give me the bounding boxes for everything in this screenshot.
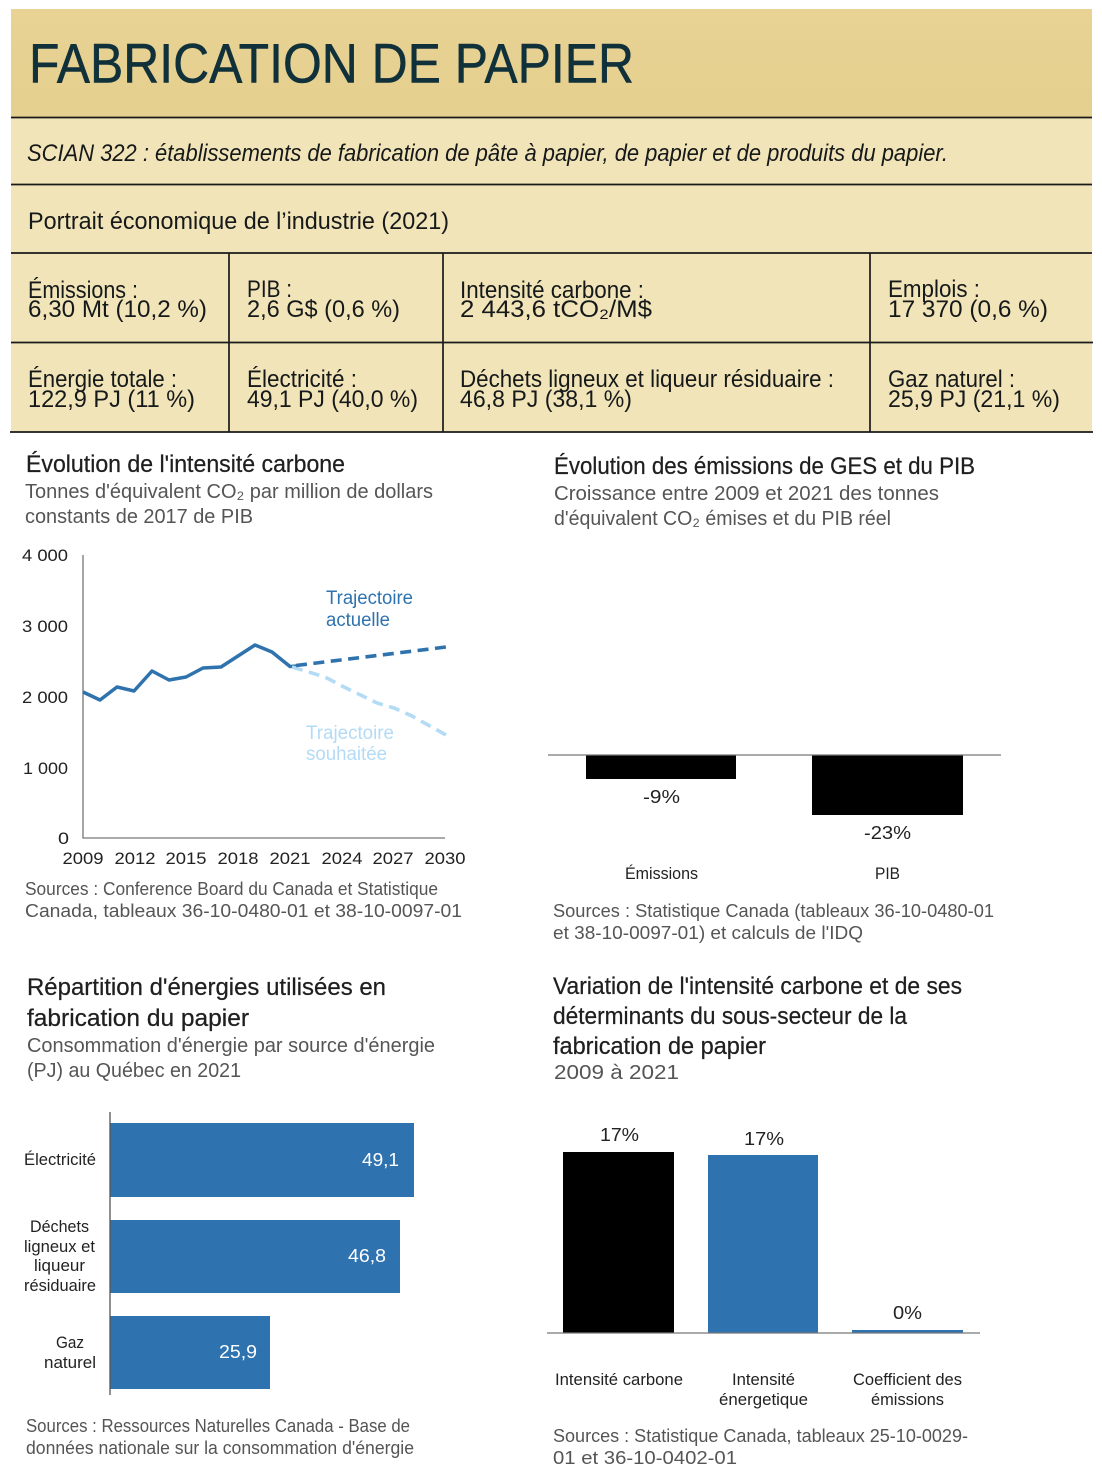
line chart: 2009 xyxy=(62,849,104,868)
figure: electricity: 49,1 PJ (40,0 %) xyxy=(247,386,418,413)
heading: carbon intensity drivers: déterminants du sous-secteur de la xyxy=(553,1003,908,1030)
figure: electricity: Électricité : xyxy=(247,366,357,393)
bar chart: emissions and GDP xyxy=(548,755,1001,883)
figure: GDP: PIB : xyxy=(247,276,292,303)
sources: energy mix: Sources : Ressources Naturelles Canada - Base de xyxy=(26,1415,410,1436)
figure: GDP: 2,6 G$ (0,6 %) xyxy=(247,296,400,323)
heading: energy mix: fabrication du papier xyxy=(27,1005,249,1032)
figure: jobs xyxy=(888,276,1048,323)
sources: carbon intensity drivers: 01 et 36-10-0402-01 xyxy=(553,1447,737,1468)
bar chart: drivers: 17% xyxy=(744,1129,784,1149)
line chart xyxy=(22,546,466,868)
line chart: 0 xyxy=(58,829,69,848)
line chart: 2021 xyxy=(270,849,310,868)
heading: energy mix: Répartition d'énergies utilisées en xyxy=(27,974,386,1001)
subtitle: energy mix: Consommation d'énergie par source d'énergie xyxy=(27,1034,435,1057)
line chart: 2015 xyxy=(166,849,206,868)
heading: carbon intensity drivers: fabrication de papier xyxy=(553,1033,766,1060)
sources: carbon intensity trend: Canada, tableaux 36-10-0480-01 et 38-10-0097-01 xyxy=(25,900,462,921)
bar chart: drivers: énergetique xyxy=(719,1391,808,1409)
bar chart: energy sources: 49,1 xyxy=(362,1150,399,1170)
sources: GHG emissions and GDP: Sources : Statistique Canada (tableaux 36-10-0480-01 xyxy=(553,900,994,921)
panel: carbon intensity drivers xyxy=(547,973,980,1468)
subtitle: GHG emissions and GDP xyxy=(554,482,939,530)
sources: carbon intensity trend: Sources : Conference Board du Canada et Statistique xyxy=(25,878,438,899)
figure: wood waste and spent liquor: 46,8 PJ (38,1 %) xyxy=(460,386,632,413)
panel: economic portrait heading: Portrait économique de l’industrie (2021) xyxy=(28,208,449,235)
figure: emissions: Émissions : xyxy=(28,277,138,304)
bar chart: emissions and GDP: -9% xyxy=(643,787,680,807)
figure: electricity xyxy=(247,366,418,413)
sources: GHG emissions and GDP: et 38-10-0097-01) et calculs de l'IDQ xyxy=(553,922,863,943)
sources: energy mix: données nationale sur la consommation d'énergie xyxy=(26,1437,414,1458)
bar chart: drivers: Intensité xyxy=(732,1371,795,1389)
sources: carbon intensity trend xyxy=(25,878,462,921)
bar chart: energy sources: liqueur xyxy=(34,1257,86,1275)
line chart: 2024 xyxy=(322,849,362,868)
sources: GHG emissions and GDP xyxy=(553,900,994,943)
label: desired trajectory: souhaitée xyxy=(306,744,387,765)
bar chart: energy sources: ligneux et xyxy=(24,1238,95,1256)
line chart: 1 000 xyxy=(23,759,68,778)
line chart: 2027 xyxy=(372,849,414,868)
subtitle: carbon intensity trend: constants de 2017 de PIB xyxy=(25,505,253,528)
bar chart: emissions and GDP: PIB xyxy=(875,865,900,883)
panel: GHG emissions and GDP change xyxy=(548,453,1001,943)
subtitle: GHG emissions and GDP: Croissance entre 2009 et 2021 des tonnes xyxy=(554,482,939,505)
figure: natural gas: 25,9 PJ (21,1 %) xyxy=(888,386,1060,413)
sources: carbon intensity drivers xyxy=(553,1425,968,1468)
figure: total energy: Énergie totale : xyxy=(28,366,177,393)
header panel xyxy=(11,9,1092,117)
heading: carbon intensity drivers xyxy=(553,973,962,1060)
panel: key figures table xyxy=(10,118,1093,432)
bar chart: energy sources xyxy=(24,1112,414,1395)
figure: natural gas: Gaz naturel : xyxy=(888,366,1015,393)
panel: energy mix xyxy=(24,974,435,1458)
figure: emissions: 6,30 Mt (10,2 %) xyxy=(28,296,207,323)
bar chart: energy sources: Déchets xyxy=(30,1218,89,1236)
figure: carbon intensity xyxy=(460,277,652,323)
figure: GDP xyxy=(247,276,400,323)
bar chart: energy sources: naturel xyxy=(44,1354,96,1372)
heading: energy mix xyxy=(27,974,386,1032)
line chart: 2018 xyxy=(218,849,258,868)
bar chart: energy sources: Électricité xyxy=(24,1150,96,1169)
bar chart: energy sources: 25,9 xyxy=(219,1342,257,1362)
line chart: 2030 xyxy=(424,849,466,868)
bar chart: drivers: émissions xyxy=(871,1391,944,1409)
bar chart: drivers: Coefficient des xyxy=(853,1371,962,1389)
panel: economic portrait heading xyxy=(11,185,1092,253)
subtitle: energy mix xyxy=(27,1034,435,1082)
line chart: 4 000 xyxy=(22,546,68,565)
bar chart: energy sources: résiduaire xyxy=(24,1277,96,1295)
label: desired trajectory xyxy=(306,723,394,765)
bar chart: drivers xyxy=(547,1125,980,1409)
sources: carbon intensity drivers: Sources : Statistique Canada, tableaux 25-10-0029- xyxy=(553,1425,968,1446)
heading: GHG emissions and GDP: Évolution des émissions de GES et du PIB xyxy=(554,453,975,480)
panel: industry definition: SCIAN 322 : établissements de fabrication de pâte à papier, de papier et de produits du papier. xyxy=(27,140,948,167)
bar chart: emissions and GDP: Émissions xyxy=(625,864,698,883)
line chart: 2 000 xyxy=(22,688,68,707)
figure: jobs: Emplois : xyxy=(888,276,980,303)
bar chart: drivers: Intensité carbone xyxy=(555,1371,683,1389)
figure: wood waste and spent liquor xyxy=(460,366,834,413)
figure: carbon intensity: Intensité carbone : xyxy=(460,277,644,304)
figure: total energy: 122,9 PJ (11 %) xyxy=(28,386,195,413)
panel: carbon intensity trend xyxy=(22,451,466,921)
line chart: 2012 xyxy=(114,849,156,868)
bar chart: drivers: 0% xyxy=(893,1303,922,1323)
figure: total energy xyxy=(28,366,195,413)
line chart: 3 000 xyxy=(22,617,68,636)
label: current trajectory xyxy=(326,588,413,631)
figure: wood waste and spent liquor: Déchets ligneux et liqueur résiduaire : xyxy=(460,366,834,393)
panel: industry definition xyxy=(11,117,1092,185)
subtitle: energy mix: (PJ) au Québec en 2021 xyxy=(27,1059,241,1082)
sources: energy mix xyxy=(26,1415,414,1458)
bar chart: energy sources: Gaz xyxy=(56,1334,84,1352)
subtitle: period: 2009 à 2021 xyxy=(554,1061,679,1084)
figure: jobs: 17 370 (0,6 %) xyxy=(888,296,1048,323)
label: current trajectory: actuelle xyxy=(326,610,390,631)
subtitle: carbon intensity trend xyxy=(25,480,433,528)
heading: carbon intensity trend: Évolution de l'intensité carbone xyxy=(26,451,345,478)
label: current trajectory: Trajectoire xyxy=(326,588,413,609)
label: desired trajectory: Trajectoire xyxy=(306,723,394,744)
bar chart: energy sources: 46,8 xyxy=(348,1246,386,1266)
title: FABRICATION DE PAPIER xyxy=(29,32,634,94)
figure: carbon intensity: 2 443,6 tCO₂/M$ xyxy=(460,296,652,323)
bar chart: drivers: 17% xyxy=(600,1125,639,1145)
figure: emissions xyxy=(28,277,207,323)
heading: carbon intensity drivers: Variation de l'intensité carbone et de ses xyxy=(553,973,962,1000)
subtitle: GHG emissions and GDP: d'équivalent CO₂ émises et du PIB réel xyxy=(554,507,891,530)
figure: natural gas xyxy=(888,366,1060,413)
subtitle: carbon intensity trend: Tonnes d'équivalent CO₂ par million de dollars xyxy=(25,480,433,503)
bar chart: emissions and GDP: -23% xyxy=(864,823,911,843)
